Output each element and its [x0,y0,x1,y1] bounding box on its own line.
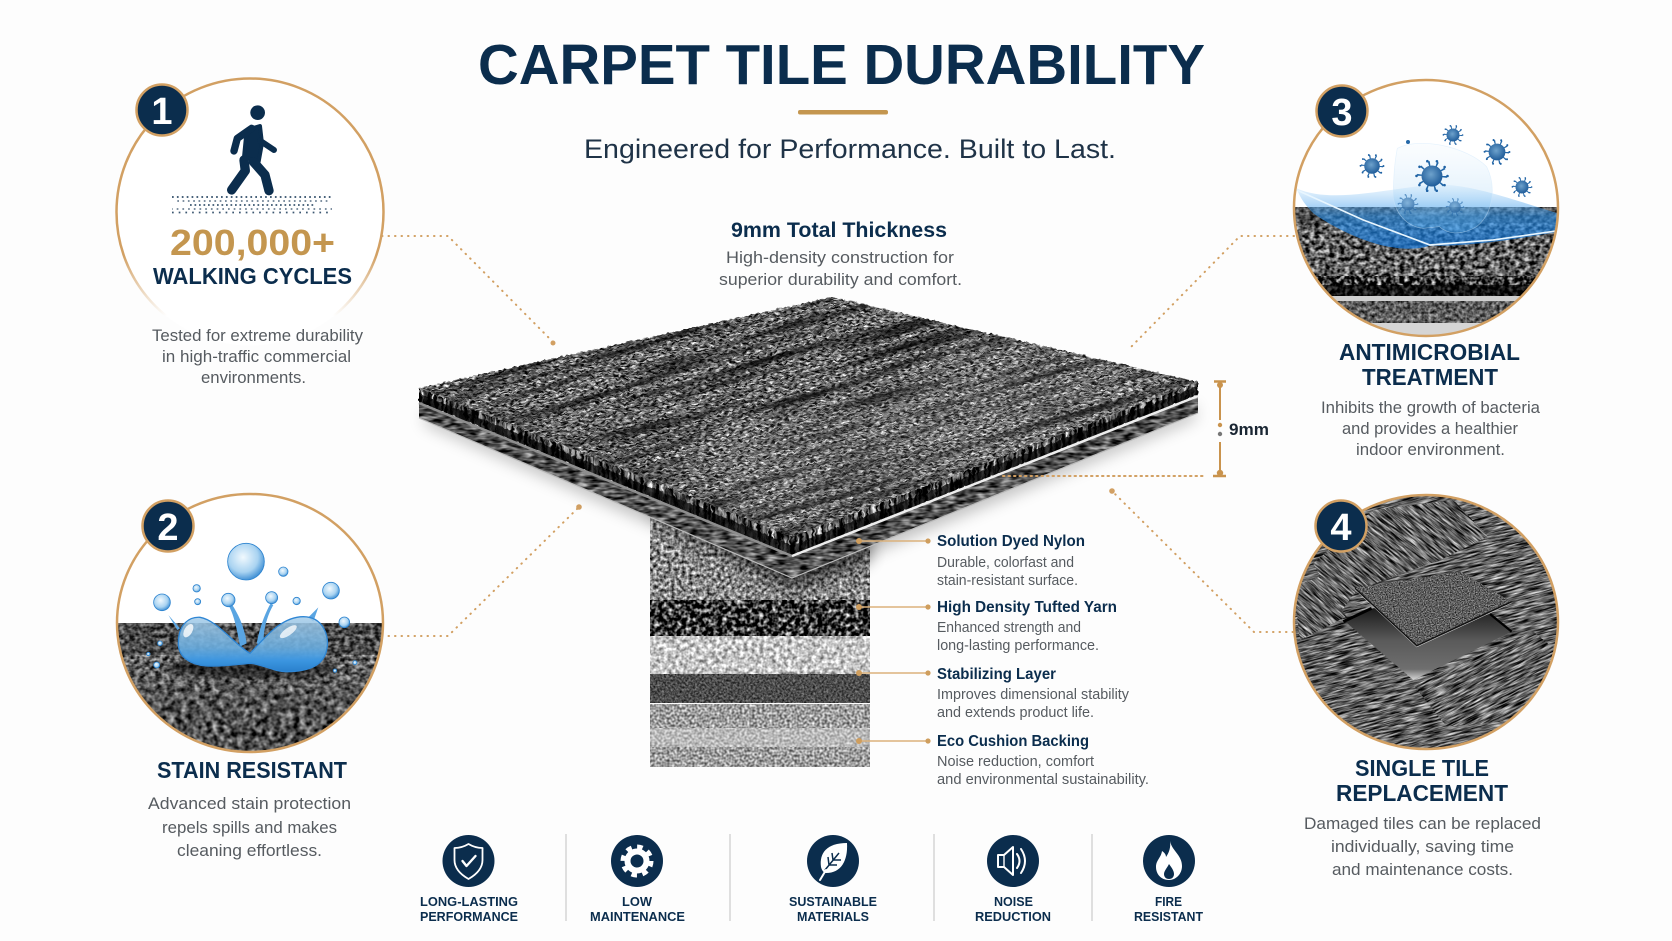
badge 3 [1316,86,1368,136]
illustration: protective film and microbes [1290,80,1565,338]
layer: stabilizing layer: and extends product life. [937,705,1094,721]
description: in high-traffic commercial [162,347,351,366]
description: and provides a healthier [1342,419,1518,438]
description [148,794,351,860]
layer: stabilizing layer: Stabilizing Layer [937,666,1056,683]
feature: low maintenance: LOW [622,894,653,909]
description [1321,398,1541,459]
layer: stabilizing layer [937,666,1130,721]
layer: high density tufted yarn: long-lasting performance. [937,638,1099,654]
description: Damaged tiles can be replaced [1304,814,1541,833]
feature: noise reduction: REDUCTION [975,909,1051,924]
layer: solution dyed nylon [937,533,1085,589]
heading: WALKING CYCLES [153,263,352,289]
layer: eco cushion backing [937,733,1149,788]
thickness description [719,248,962,289]
layer: eco cushion backing: Noise reduction, comfort [937,754,1094,770]
badge 4 [1316,500,1366,552]
description: repels spills and makes [162,818,337,837]
description [1304,814,1541,879]
feature: fire resistant [1134,835,1203,924]
illustration: water splash on carpet [110,494,390,758]
layer leaders [856,538,931,744]
badge 3: 3 [1331,92,1353,134]
description: Advanced stain protection [148,794,351,813]
panel: single tile replacement [1292,494,1560,875]
heading [1336,755,1508,806]
ring [116,78,384,346]
panel: walking cycles [116,78,384,387]
stat: 200,000+: 200,000+ [170,222,335,263]
heading: STAIN RESISTANT [157,757,347,783]
connector: stain resistant [382,504,582,636]
badge 4: 4 [1330,507,1352,549]
badge 1: 1 [151,91,173,133]
feature: sustainable materials: MATERIALS [797,909,869,924]
heading: REPLACEMENT [1336,780,1508,806]
thickness heading: 9mm Total Thickness [731,219,947,242]
carpet tile [418,297,1198,578]
panel: stain resistant [110,494,390,860]
connector: walking cycles [382,236,556,346]
heading: TREATMENT [1362,364,1498,390]
layer: solution dyed nylon: Solution Dyed Nylon [937,533,1085,550]
tile backing [410,395,1210,585]
title accent bar [798,110,888,114]
feature: sustainable materials [789,835,877,924]
tile drop shadow [425,405,1195,586]
description: individually, saving time [1331,837,1514,856]
feature: sustainable materials: SUSTAINABLE [789,894,877,909]
cross-section layers [650,505,870,767]
heading: ANTIMICROBIAL [1339,339,1520,365]
feature: long-lasting performance [420,835,518,924]
description: Tested for extreme durability [152,326,363,345]
dimension bracket: 9mm [1003,382,1269,476]
panel: antimicrobial treatment [1290,80,1565,459]
dimension bracket: 9mm: 9mm [1229,421,1269,439]
feature: noise reduction: NOISE [994,894,1033,909]
description: environments. [201,368,306,387]
title: CARPET TILE DURABILITY [478,33,1205,97]
tile highlight lines [419,396,1198,556]
feature: low maintenance [590,835,685,924]
feature: fire resistant: FIRE [1155,894,1182,909]
thickness description: superior durability and comfort. [719,270,962,289]
subtitle: Engineered for Performance. Built to Last. [584,134,1116,164]
heading: SINGLE TILE [1355,755,1489,781]
feature: low maintenance: MAINTENANCE [590,909,685,924]
layer: high density tufted yarn: Enhanced strength and [937,620,1081,636]
layer: solution dyed nylon: stain-resistant surface. [937,573,1078,589]
tile top surface [418,297,1198,537]
tile pile edge [418,297,1198,554]
layer: high density tufted yarn: High Density Tufted Yarn [937,599,1117,616]
thickness description: High-density construction for [726,248,954,267]
feature: fire resistant: RESISTANT [1134,909,1203,924]
description: and maintenance costs. [1332,860,1513,879]
description: Inhibits the growth of bacteria [1321,398,1541,417]
layer: stabilizing layer: Improves dimensional stability [937,687,1130,703]
connector: single tile replacement [1109,488,1293,632]
connector: antimicrobial [1131,236,1294,347]
layer: solution dyed nylon: Durable, colorfast and [937,555,1074,571]
layer: high density tufted yarn [937,599,1117,654]
feature: long-lasting performance: PERFORMANCE [420,909,518,924]
heading [1339,339,1520,390]
badge 2 [142,500,194,552]
icon: walker on carpet [172,105,332,212]
feature: noise reduction [975,835,1051,924]
badge 2: 2 [157,507,179,549]
feature strip [420,834,1203,924]
feature: long-lasting performance: LONG-LASTING [420,894,518,909]
description [152,326,363,387]
illustration: lifted carpet tile [1292,494,1560,750]
layer: eco cushion backing: and environmental sustainability. [937,772,1149,788]
badge 1 [136,84,188,136]
description: cleaning effortless. [177,841,322,860]
description: indoor environment. [1356,440,1505,459]
layer: eco cushion backing: Eco Cushion Backing [937,733,1089,750]
